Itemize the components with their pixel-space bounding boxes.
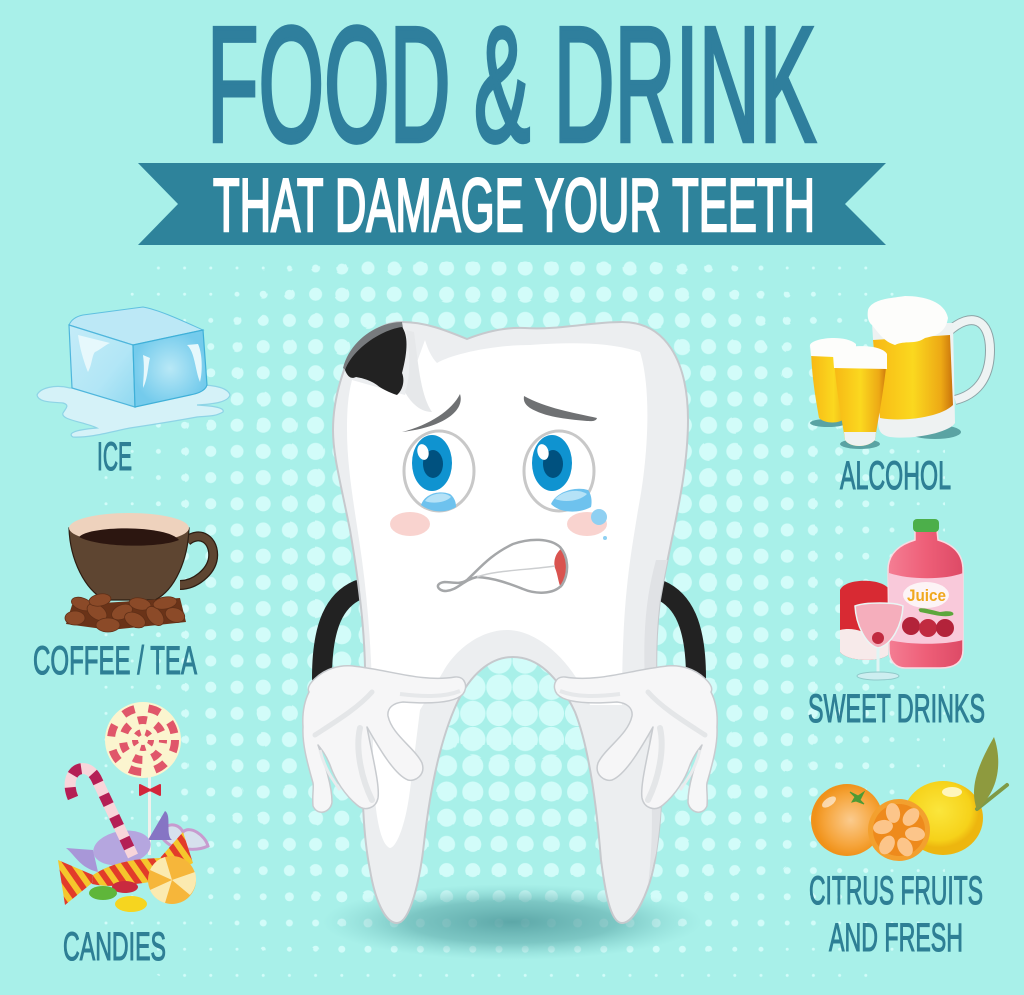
mug foam — [868, 296, 948, 345]
striped candy — [58, 832, 193, 905]
arm: right — [660, 590, 696, 678]
lemon — [903, 781, 983, 855]
cube top — [69, 307, 203, 345]
orange slice — [868, 799, 930, 861]
icon: beer glasses — [810, 296, 990, 449]
candy cane — [70, 769, 133, 856]
front glass — [833, 346, 887, 449]
icon: citrus fruits — [811, 737, 1007, 861]
juice bottle — [888, 519, 963, 668]
glass shadow — [909, 425, 961, 439]
mug beer — [873, 335, 953, 419]
label: ice: ICE — [97, 435, 132, 479]
tooth character — [303, 322, 717, 923]
heart candy — [160, 825, 208, 849]
tooth highlight — [347, 340, 647, 848]
mouth — [438, 540, 568, 593]
label: coffee / tea: COFFEE / TEA — [33, 639, 197, 683]
right cheek — [567, 512, 607, 536]
ground shadow — [322, 884, 702, 960]
cup body — [69, 528, 189, 600]
bow — [140, 785, 160, 795]
leaf — [974, 737, 1007, 810]
cup rim — [69, 513, 189, 543]
label: citrus fruits and fresh — [809, 869, 983, 960]
lollipop — [105, 702, 181, 778]
left eyebrow — [402, 394, 461, 432]
label: candies: CANDIES — [63, 925, 166, 969]
bottle cap — [913, 519, 939, 532]
coffee beans — [65, 592, 187, 632]
handle — [180, 536, 213, 585]
tooth right shading — [644, 560, 668, 885]
cocktail glass — [855, 603, 903, 680]
arm: left — [322, 590, 358, 678]
icon: candies — [58, 702, 208, 912]
icon: sweet drinks — [840, 519, 963, 680]
cube right face — [133, 330, 207, 407]
soda can — [840, 581, 888, 660]
mug glass — [872, 323, 955, 438]
left eye — [404, 431, 474, 511]
icon: ice cube — [37, 307, 230, 437]
lollipop stick — [148, 775, 151, 855]
coffee — [79, 528, 179, 546]
icon: coffee cup — [65, 513, 213, 632]
sweat drop — [591, 509, 607, 540]
right glove — [554, 666, 717, 812]
melt puddle — [37, 385, 230, 437]
bottle label — [889, 573, 963, 644]
juice label text — [903, 582, 949, 608]
right eyebrow — [524, 396, 597, 421]
small glass — [810, 338, 856, 427]
cavity — [343, 322, 432, 412]
juice bottle: Juice — [907, 586, 946, 605]
right eye — [524, 431, 594, 512]
cube left face — [69, 325, 135, 407]
purple candy — [66, 811, 172, 872]
gems — [89, 881, 147, 912]
halftone dot field — [85, 255, 945, 985]
swirl candy — [148, 856, 196, 904]
tooth body — [333, 322, 688, 923]
left glove — [303, 666, 466, 812]
mug handle — [948, 320, 990, 400]
banner ribbon — [138, 163, 886, 247]
cherries — [902, 608, 954, 637]
left cheek — [390, 512, 430, 536]
orange — [811, 784, 883, 856]
